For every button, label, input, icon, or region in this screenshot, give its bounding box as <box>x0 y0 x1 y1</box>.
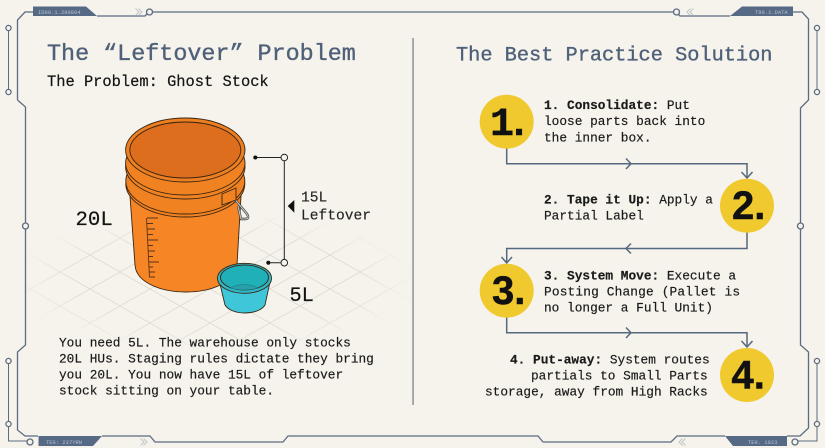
text block: problem description: you 20L. You now have 15L of leftover <box>59 368 343 383</box>
cup rim <box>218 263 272 293</box>
title: right panel: The Best Practice Solution <box>456 44 772 68</box>
step 4 text <box>485 352 710 399</box>
label: 5L: 5L <box>290 285 314 308</box>
bucket measuring scale <box>146 218 159 277</box>
illustration: 5L teal cup <box>218 263 272 313</box>
badge 2: 2. <box>732 184 765 228</box>
step 1 text <box>544 98 705 146</box>
step 2 <box>544 179 774 233</box>
step 3 text <box>544 268 740 316</box>
tag: bottom right <box>725 436 787 446</box>
step 2 text: Partial Label <box>544 209 644 224</box>
step 2 text: 2. Tape it Up: Apply a <box>544 193 713 208</box>
tag: top right <box>730 6 793 16</box>
badge 1: 1 <box>490 103 514 148</box>
step 3 text: 3. System Move: Execute a <box>544 268 736 283</box>
connector arrow: step 3 to 4 <box>507 317 752 347</box>
badge 2 <box>720 179 774 233</box>
text block: problem description: You need 5L. The warehouse only stocks <box>59 336 351 351</box>
title: left panel: The “Leftover” Problem <box>47 42 356 68</box>
tag: top left <box>33 6 97 16</box>
step 3 text: Posting Change (Pallet is <box>544 284 740 299</box>
tag: bottom right: TE0. 1023 <box>748 440 778 446</box>
tag: bottom left: TEG: 237YRN <box>46 440 82 446</box>
chevrons <box>136 8 694 446</box>
badge 3: 3. <box>492 269 525 313</box>
panel divider <box>412 38 414 405</box>
text block: problem description <box>59 336 374 399</box>
connector arrow: step 2 to 3 <box>502 232 747 263</box>
illustration: 20L orange bucket <box>126 118 248 292</box>
tag: bottom left <box>38 436 102 446</box>
cup interior <box>220 265 268 290</box>
step 4 text: 4. Put-away: System routes <box>510 352 710 367</box>
step 4 text: partials to Small Parts <box>531 368 708 383</box>
step 3 text: no longer a Full Unit) <box>544 300 713 316</box>
step 1 text: loose parts back into <box>544 114 705 129</box>
text block: problem description: 20L HUs. Staging rules dictate they bring <box>59 352 374 367</box>
cup body <box>220 282 270 313</box>
dimension bracket: 15L leftover <box>253 154 371 266</box>
cup floor <box>230 284 258 290</box>
connector arrow: step 1 to 2 <box>507 148 752 178</box>
step 1 <box>480 95 705 149</box>
tag: top right: T90.1.DATA <box>755 10 789 16</box>
tag: top left: ID00.1.299804 <box>38 10 81 16</box>
bucket body <box>130 196 241 292</box>
dimension bracket: 15L leftover: 15L <box>301 191 327 207</box>
badge 3 <box>480 264 534 318</box>
badge 1: . <box>514 100 525 144</box>
step 3 <box>480 264 740 318</box>
badge 4: 4. <box>732 354 765 398</box>
text block: problem description: stock sitting on your table. <box>59 384 274 399</box>
badge 1 <box>480 95 534 149</box>
label: 20L: 20L <box>76 209 113 232</box>
step 2 text <box>544 193 713 224</box>
step 4 <box>485 348 774 402</box>
step 1 text: the inner box. <box>544 130 652 146</box>
step 1 text: 1. Consolidate: Put <box>544 98 690 113</box>
dimension bracket: 15L leftover: Leftover <box>301 208 371 224</box>
bucket handle <box>222 188 248 219</box>
bucket rims <box>126 118 245 217</box>
badge 4 <box>720 348 774 402</box>
step 4 text: storage, away from High Racks <box>485 384 708 399</box>
subtitle: The Problem: Ghost Stock <box>47 73 269 91</box>
